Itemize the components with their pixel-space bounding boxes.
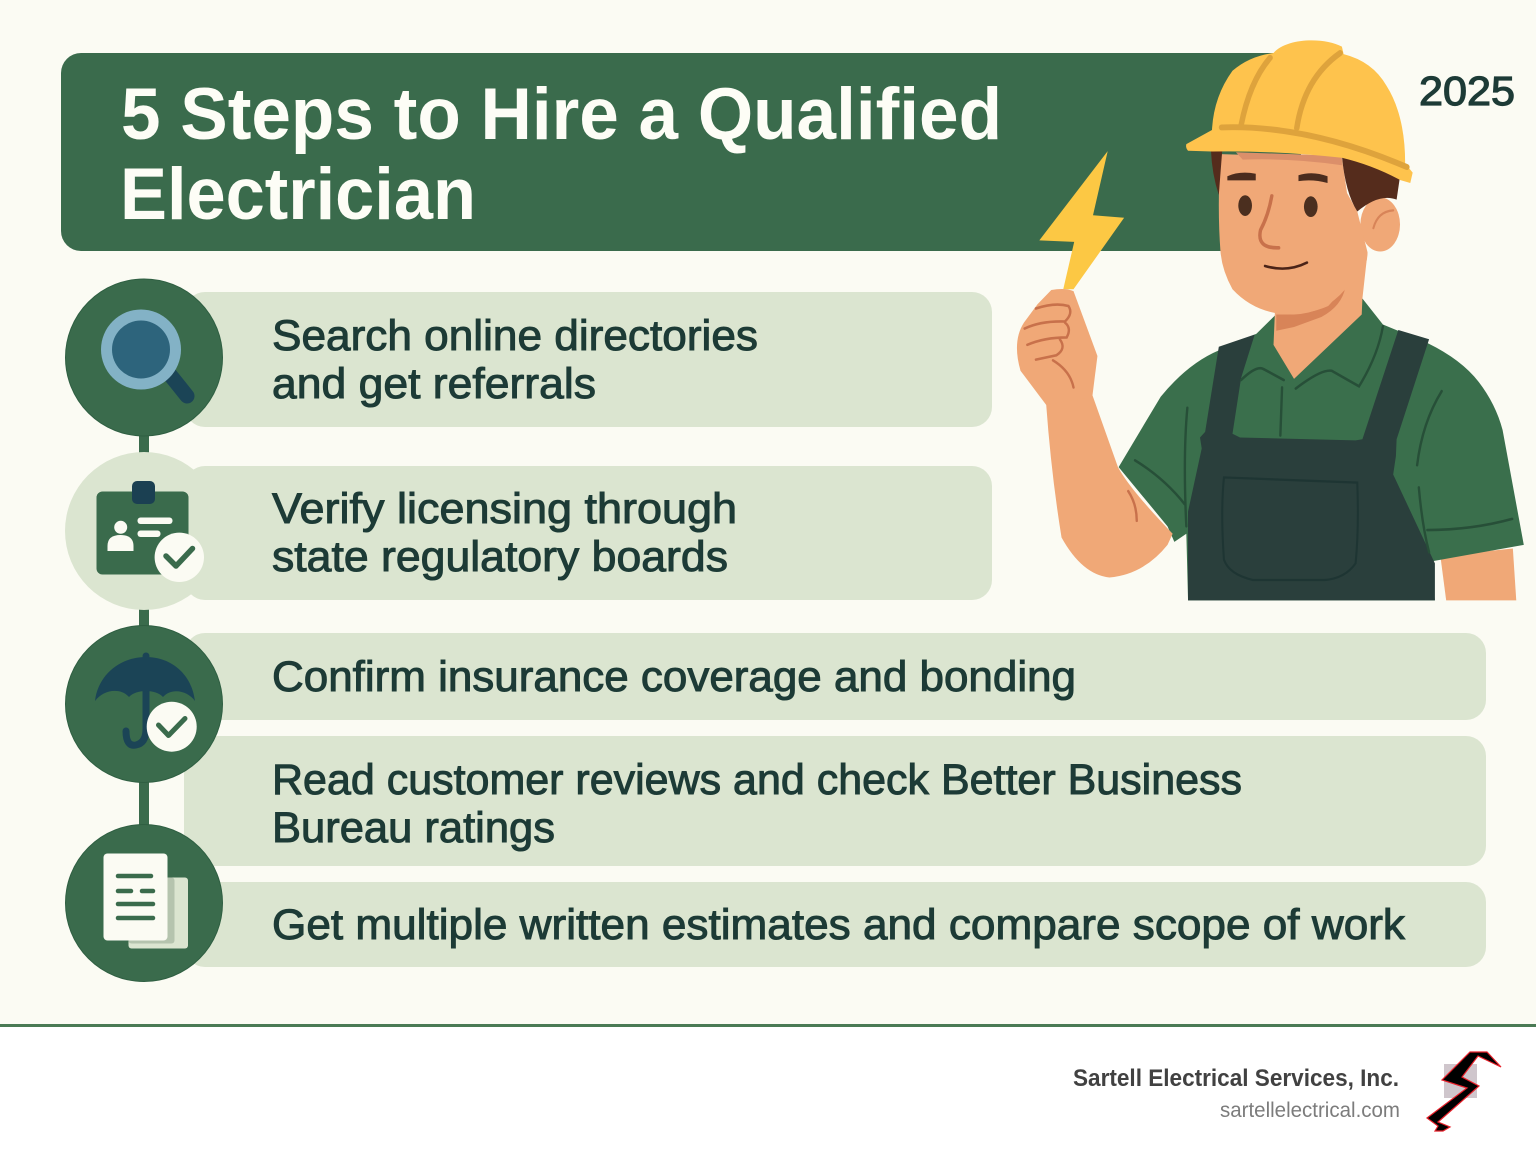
step 1 text — [272, 312, 758, 408]
face — [1219, 154, 1368, 314]
facial features — [1227, 173, 1393, 269]
step 1 text: Search online directories — [272, 312, 758, 360]
far arm — [1440, 549, 1516, 600]
step 5 panel — [185, 882, 1486, 967]
step 4 panel — [184, 736, 1486, 866]
footer — [0, 1024, 1536, 1154]
title: 5 Steps to Hire a Qualified — [121, 74, 1002, 155]
hard hat — [1186, 40, 1413, 183]
overalls — [1188, 330, 1435, 600]
year label: 2025 — [1419, 68, 1515, 114]
website: sartellelectrical.com — [1220, 1099, 1400, 1122]
shirt — [1119, 299, 1524, 600]
lightning bolt — [1039, 151, 1124, 289]
step 4 text: Bureau ratings — [272, 804, 555, 852]
step 1 text: and get referrals — [272, 360, 596, 408]
electrician illustration — [1017, 40, 1524, 600]
hand — [1017, 289, 1097, 405]
connector line — [139, 430, 149, 830]
step 4 text: Read customer reviews and check Better Business — [272, 756, 1242, 804]
ear — [1360, 197, 1400, 251]
step 2 panel — [185, 466, 992, 600]
step 2 text: state regulatory boards — [272, 533, 728, 581]
step 2 text: Verify licensing through — [272, 485, 737, 533]
neck — [1274, 252, 1368, 379]
company name: Sartell Electrical Services, Inc. — [1073, 1065, 1399, 1092]
icon: logo bolt — [1427, 1052, 1501, 1131]
step 4 text — [272, 756, 1242, 852]
hair — [1211, 150, 1400, 211]
title — [120, 74, 1002, 235]
neck shadow — [1276, 287, 1345, 331]
icon: umbrella — [66, 626, 222, 782]
icon: documents — [66, 824, 222, 982]
step 3 panel — [185, 633, 1486, 720]
forehead shadow — [1236, 152, 1342, 165]
title: Electrician — [120, 154, 476, 235]
hand and clothing lines — [1025, 305, 1512, 580]
step 5 text: Get multiple written estimates and compare scope of work — [272, 901, 1405, 949]
step 2 text — [272, 485, 737, 581]
step 3 text: Confirm insurance coverage and bonding — [272, 653, 1076, 701]
icon: magnifying glass — [66, 279, 222, 436]
title banner — [61, 53, 1301, 251]
step 1 panel — [185, 292, 992, 427]
arm — [1046, 395, 1173, 577]
icon: license badge — [65, 452, 223, 610]
